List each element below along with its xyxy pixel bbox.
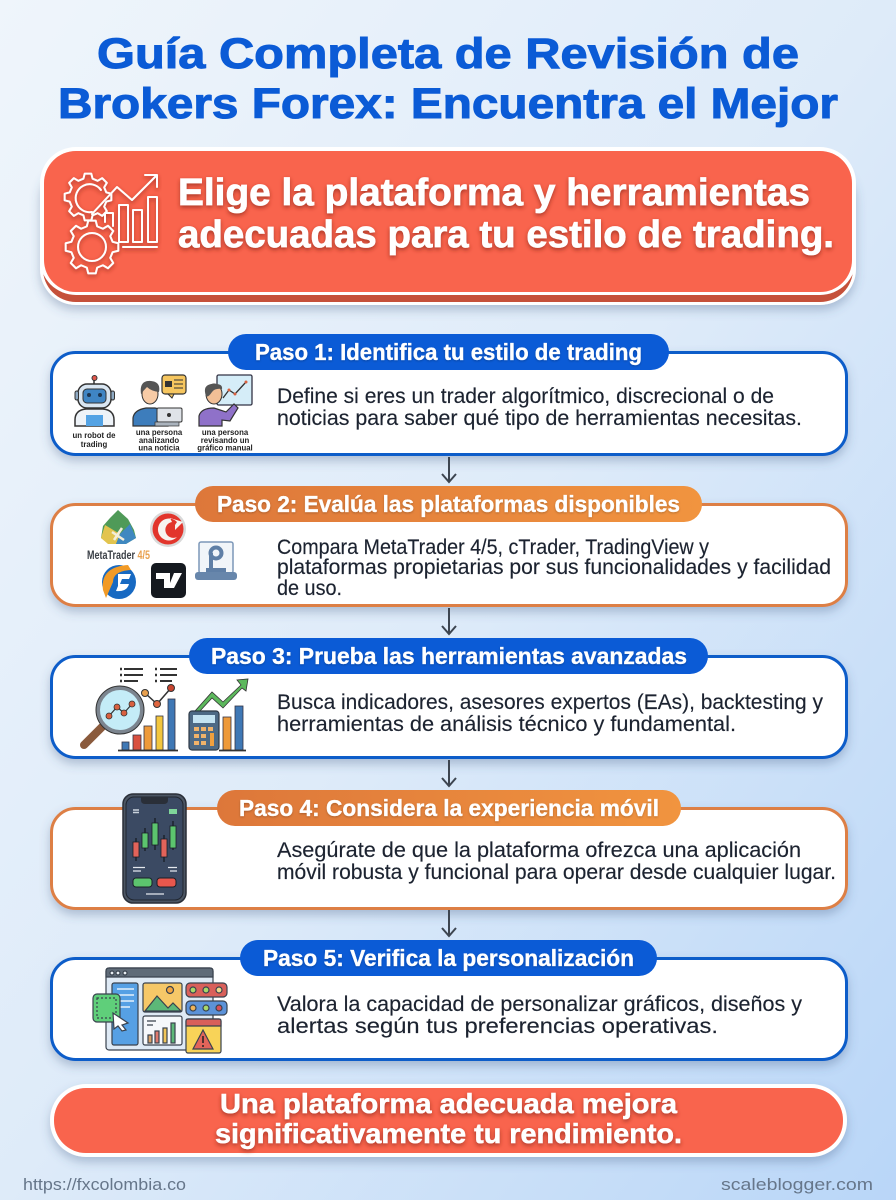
icon: person analysing news: analizando [139, 436, 179, 445]
step 2 heading: Paso 2: Evalúa las plataformas disponibles [217, 491, 680, 517]
step 4 heading: Paso 4: Considera la experiencia móvil [239, 795, 659, 821]
step 3 heading: Paso 3: Prueba las herramientas avanzadas [211, 643, 687, 669]
panel: step 5 [52, 940, 846, 1060]
arrow: step 4 to 5 [442, 910, 456, 936]
icon: gears and growth chart [65, 174, 157, 273]
icon: person analysing news: una persona [136, 428, 183, 437]
conclusion text: significativamente tu rendimiento. [215, 1118, 682, 1149]
icon: person reviewing chart: revisando un [201, 436, 249, 445]
icon: person reviewing chart [197, 375, 253, 452]
footer: source url: https://fxcolombia.co [23, 1175, 186, 1194]
title: Brokers Forex: Encuentra el Mejor [58, 80, 838, 128]
panel: step 4 [52, 790, 846, 908]
icon: trading robot [73, 376, 116, 449]
panel: conclusion banner [50, 1084, 847, 1157]
step 3 text: herramientas de análisis técnico y fundamental. [277, 713, 736, 736]
icon: FS logo [102, 565, 136, 599]
hero text: adecuadas para tu estilo de trading. [178, 214, 834, 256]
icon: person analysing news: una noticia [138, 444, 180, 452]
conclusion text [215, 1088, 682, 1149]
step 4 heading [217, 790, 681, 826]
step 2 text: de uso. [277, 577, 342, 600]
step 3 text [277, 691, 823, 736]
arrow: step 1 to 2 [442, 457, 456, 482]
step 1 heading: Paso 1: Identifica tu estilo de trading [255, 339, 642, 365]
step 2 text: plataformas propietarias por sus funcionalidades y facilidad [277, 556, 831, 579]
icon: trading robot: un robot de [73, 431, 116, 440]
step 4 text [277, 839, 836, 884]
step 1 text: noticias para saber qué tipo de herramientas necesitas. [277, 407, 802, 430]
icon: magnifier and bar chart [84, 669, 178, 750]
icon: TradingView logo [151, 563, 186, 598]
icon: person analysing news [133, 375, 186, 452]
step 5 heading: Paso 5: Verifica la personalización [263, 945, 634, 971]
step 3 text: Busca indicadores, asesores expertos (EAs), backtesting y [277, 691, 823, 714]
icon: trading robot: trading [81, 440, 107, 449]
panel: step 2 [52, 486, 846, 606]
arrow: step 3 to 4 [442, 760, 456, 786]
step 1 heading [228, 334, 669, 370]
icon: calculator and growth arrow [189, 679, 248, 750]
icon: MetaTrader logo: MetaTrader 4/5 [87, 550, 150, 562]
step 5 text: Valora la capacidad de personalizar gráficos, diseños y [277, 993, 803, 1016]
icon: proprietary platform laptop [195, 542, 237, 580]
arrow: step 2 to 3 [442, 608, 456, 634]
icon: person reviewing chart: una persona [202, 428, 249, 437]
icon: customizable dashboard [93, 968, 227, 1053]
step 5 text [277, 993, 803, 1038]
icon: person reviewing chart: gráfico manual [197, 444, 253, 452]
title [58, 30, 838, 128]
title: Guía Completa de Revisión de [97, 30, 799, 78]
step 4 text: móvil robusta y funcional para operar desde cualquier lugar. [277, 861, 836, 884]
icon: MetaTrader logo [87, 510, 150, 562]
step 1 text: Define si eres un trader algorítmico, discrecional o de [277, 385, 774, 408]
conclusion text: Una plataforma adecuada mejora [220, 1088, 677, 1119]
step 2 text: Compara MetaTrader 4/5, cTrader, TradingView y [277, 536, 709, 559]
step 1 text [277, 385, 802, 430]
step 5 text: alertas según tus preferencias operativas. [277, 1015, 718, 1038]
panel: hero banner [40, 147, 856, 305]
footer: brand: scaleblogger.com [721, 1175, 873, 1194]
step 4 text: Asegúrate de que la plataforma ofrezca una aplicación [277, 839, 801, 862]
icon: smartphone with candlesticks [123, 794, 186, 903]
step 2 heading [195, 486, 702, 522]
panel: step 3 [52, 638, 846, 758]
panel: step 1 [52, 334, 846, 454]
step 2 text [277, 536, 831, 600]
hero text [178, 172, 834, 256]
step 5 heading [240, 940, 657, 976]
hero text: Elige la plataforma y herramientas [178, 172, 810, 214]
step 3 heading [189, 638, 708, 674]
icon: cTrader logo [150, 511, 186, 547]
